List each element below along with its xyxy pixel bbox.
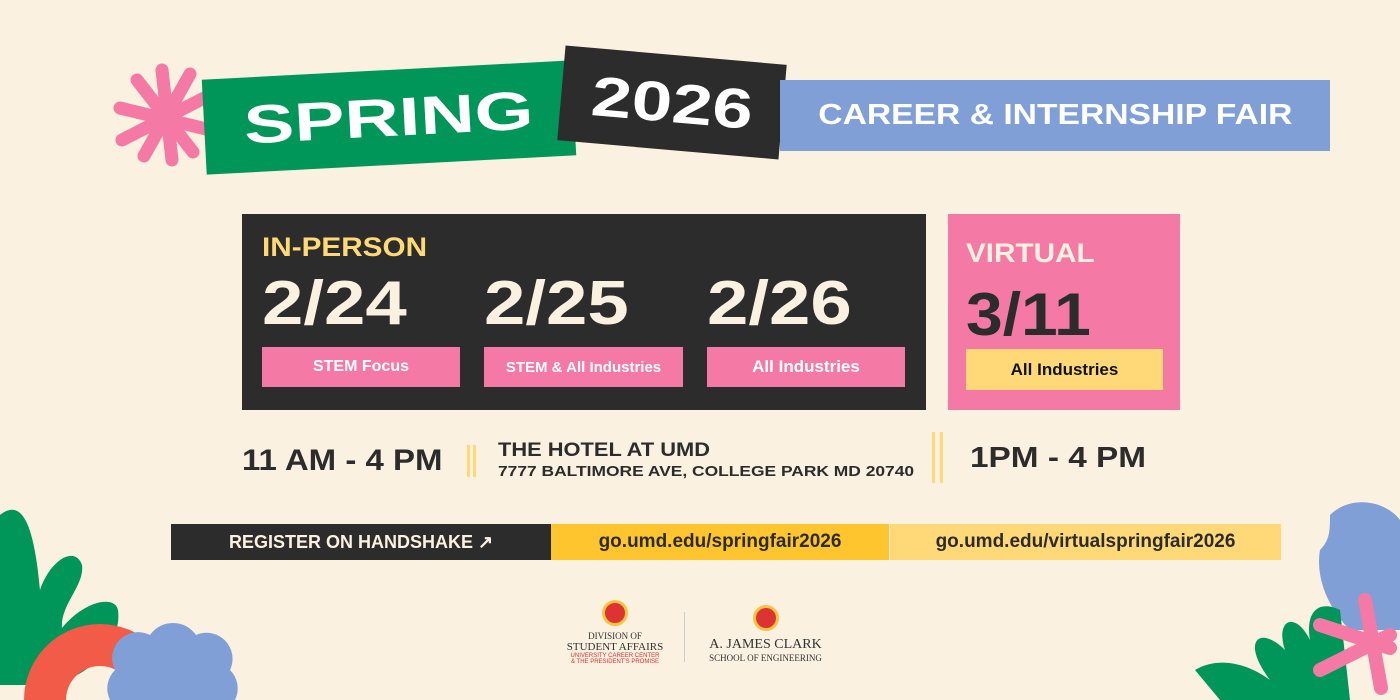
pill: STEM Focus — [262, 347, 460, 387]
divider icon — [467, 445, 476, 477]
divider icon — [932, 432, 943, 483]
pill: All Industries — [707, 347, 905, 387]
link: virtual: go.umd.edu/virtualspringfair2026 — [936, 531, 1235, 552]
logo: student affairs: DIVISION OF — [588, 631, 642, 641]
logo: student affairs — [567, 600, 663, 665]
logo: student affairs: STUDENT AFFAIRS — [567, 641, 663, 653]
logo: student affairs: & THE PRESIDENT'S PROMISE — [571, 659, 659, 665]
text: in-person time: 11 AM - 4 PM — [242, 444, 443, 477]
decoration: bottom-left plants — [0, 510, 238, 700]
text: location: THE HOTEL AT UMD — [498, 440, 710, 461]
heading: in-person: IN-PERSON — [262, 232, 427, 262]
logo: clark school: SCHOOL OF ENGINEERING — [709, 653, 822, 663]
title: 2026 — [557, 46, 787, 159]
logos — [567, 600, 822, 665]
pill: All Industries virtual: All Industries — [1011, 360, 1118, 378]
subtitle banner: CAREER & INTERNSHIP FAIR — [818, 99, 1292, 131]
title: 2026: 2026 — [589, 64, 755, 141]
dates: 2/26 — [707, 269, 852, 338]
heading: virtual: VIRTUAL — [966, 238, 1095, 268]
logo: student affairs: UNIVERSITY CAREER CENTER — [571, 653, 659, 659]
logo: clark school: A. JAMES CLARK — [709, 637, 822, 652]
pill: STEM & All Industries: STEM & All Industries — [506, 358, 661, 376]
title: SPRING — [202, 60, 576, 175]
pill: STEM Focus: STEM Focus — [313, 358, 409, 375]
text: virtual time: 1PM - 4 PM — [970, 442, 1146, 474]
logo: clark school — [709, 605, 822, 663]
date 3/11: 3/11 — [966, 281, 1091, 348]
dates — [262, 269, 852, 338]
register label: REGISTER ON HANDSHAKE ↗ — [229, 532, 493, 552]
panel: virtual — [948, 214, 1180, 410]
dates: 2/25 — [484, 269, 629, 338]
icon: pink asterisk — [114, 64, 205, 166]
link: virtual — [890, 524, 1281, 560]
link: in-person — [551, 524, 889, 560]
decoration: bottom-right plants — [1195, 502, 1400, 700]
pill: All Industries: All Industries — [752, 357, 860, 376]
subtitle banner — [780, 80, 1330, 151]
text: location: 7777 BALTIMORE AVE, COLLEGE PARK MD 20740 — [498, 463, 914, 480]
link: in-person: go.umd.edu/springfair2026 — [599, 531, 841, 552]
register label — [171, 524, 551, 560]
pill: STEM & All Industries — [484, 347, 683, 387]
pill: All Industries virtual — [966, 349, 1163, 390]
panel: in-person — [242, 214, 926, 410]
text: location — [498, 440, 914, 480]
dates: 2/24 — [262, 269, 407, 338]
register bar — [171, 524, 1281, 560]
title: SPRING: SPRING — [243, 80, 535, 155]
